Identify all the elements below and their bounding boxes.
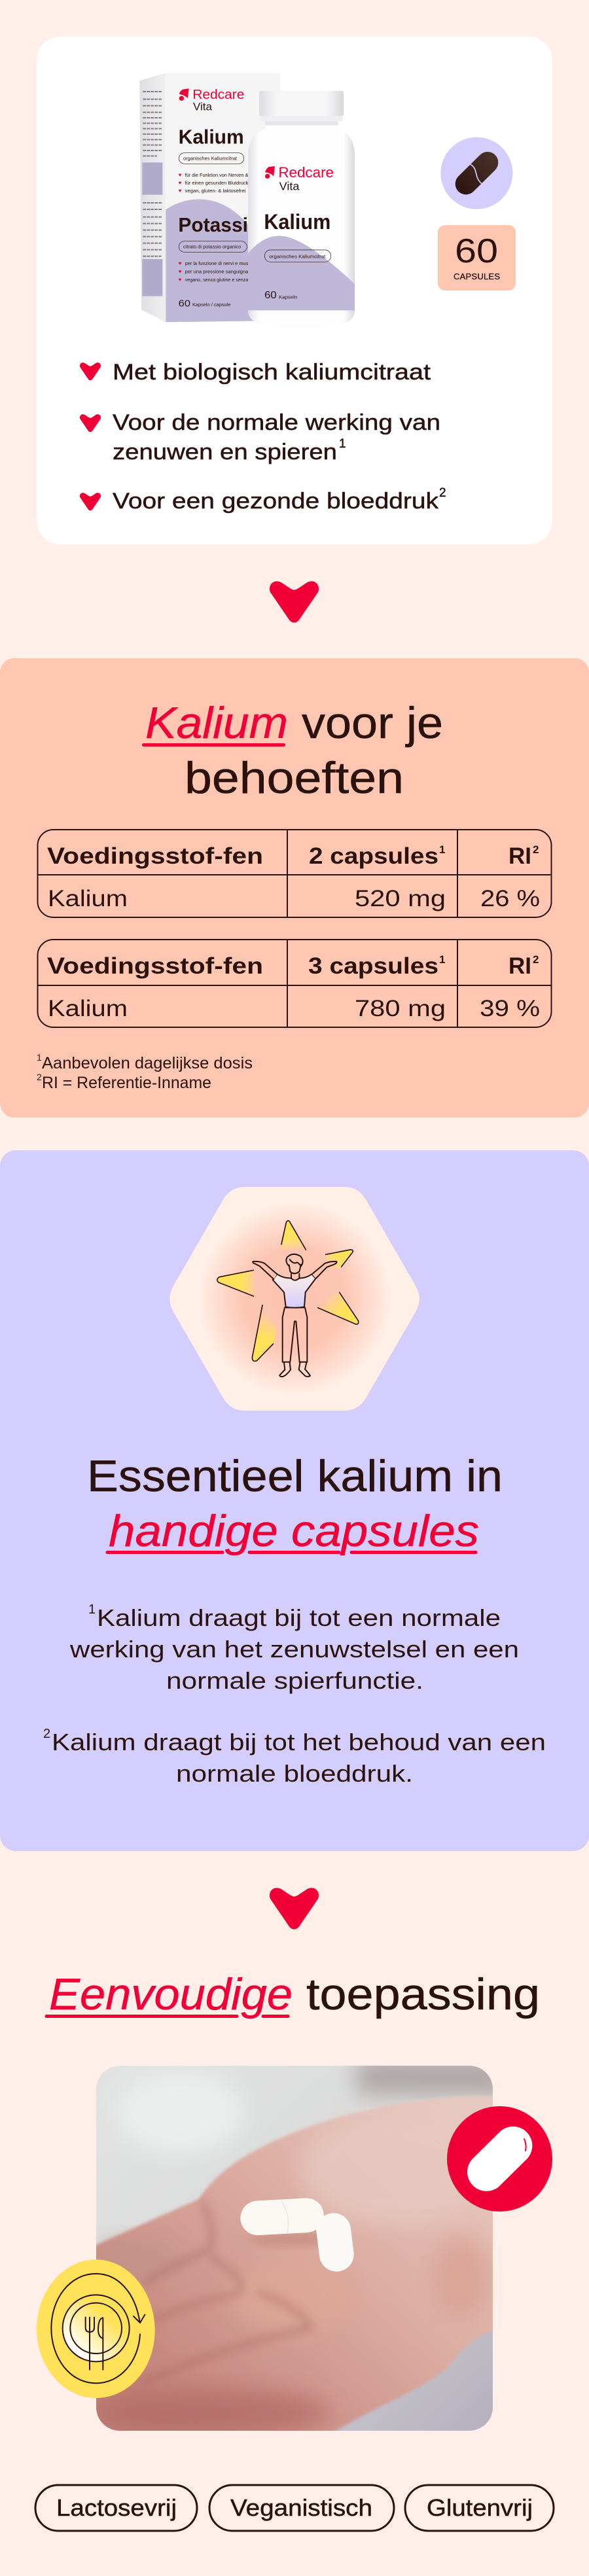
panel: product card	[37, 37, 552, 544]
box: vegan, gluten- & laktosefrei	[185, 189, 246, 194]
box: ♥	[179, 277, 182, 283]
pill: Glutenvrij	[405, 2485, 554, 2531]
illustration: person with stars in hexagon	[170, 1187, 419, 1411]
heading: Kalium voor je behoeften: Kalium	[145, 698, 288, 748]
box: Potassi	[178, 214, 248, 236]
footnotes: RI = Referentie-Inname	[42, 1074, 211, 1092]
benefit list	[80, 360, 446, 514]
icon: yellow plate badge	[37, 2259, 155, 2398]
bottle: 60	[264, 290, 277, 301]
heading: Essentieel kalium in handige capsules: handige capsules	[109, 1506, 479, 1556]
capsule shadow	[251, 2231, 318, 2248]
bottle: Redcare	[278, 164, 334, 181]
bottle: Kalium	[264, 209, 330, 234]
box: ♥	[179, 188, 182, 194]
pill: Lactosevrij	[35, 2485, 197, 2531]
text block: footnotes: normale bloeddruk.	[176, 1760, 413, 1787]
bottle: organisches Kaliumcitrat	[269, 253, 326, 259]
table: 3 capsules: RI	[509, 953, 531, 979]
box: Redcare	[192, 87, 244, 102]
text block: footnotes: 1	[88, 1602, 96, 1617]
heading: Eenvoudige toepassing: Eenvoudige	[49, 1969, 293, 2019]
heading: Kalium voor je behoeften: behoeften	[185, 753, 404, 803]
icon: heart bullet	[80, 414, 101, 432]
table: 3 capsules: Kalium	[48, 996, 128, 1021]
benefit 2: zenuwen en spieren	[113, 440, 337, 465]
benefit 3: 2	[439, 486, 446, 500]
footnotes: 2	[37, 1072, 42, 1082]
box: Kalium	[179, 126, 244, 148]
text block: footnotes	[43, 1602, 546, 1787]
badge: 60 capsules	[438, 225, 516, 291]
table: 2 capsules: 2 capsules	[309, 843, 438, 869]
feature pills	[35, 2485, 554, 2531]
box: citrato di potassio organico	[183, 244, 241, 250]
icon: heart bullet	[80, 493, 101, 510]
text block: footnotes: Kalium draagt bij tot een normale	[97, 1604, 501, 1631]
table: 2 capsules: Kalium	[48, 886, 128, 911]
text block: footnotes: 2	[43, 1727, 50, 1741]
benefit 2: 1	[339, 437, 346, 451]
badge: 60 capsules: 60	[455, 232, 498, 270]
person	[253, 1254, 336, 1377]
heading: Kalium voor je behoeften: voor je	[302, 698, 443, 748]
heading: Eenvoudige toepassing: toepassing	[306, 1969, 540, 2019]
box: per una pressione sanguigna	[185, 270, 248, 274]
bottle: Kapseln	[279, 294, 297, 300]
icon: heart arrow 2	[270, 1888, 319, 1930]
benefit 2	[113, 410, 440, 465]
table: 2 capsules: 1	[439, 843, 445, 856]
benefit 2: Voor de normale werking van	[113, 410, 440, 435]
table: 2 capsules: 520 mg	[355, 886, 446, 911]
box: vegano, senza glutine e senza	[185, 278, 248, 283]
pill: Veganistisch	[209, 2485, 394, 2531]
heading: Essentieel kalium in handige capsules: Essentieel kalium in	[87, 1451, 503, 1501]
table: 2 capsules: 26 %	[480, 886, 540, 911]
icon: heart bullet	[80, 362, 101, 380]
table: 3 capsules: 1	[439, 953, 445, 966]
bottle: Vita	[279, 180, 299, 193]
footnotes: Aanbevolen dagelijkse dosis	[42, 1054, 253, 1072]
box: Vita	[193, 100, 213, 113]
box: organisches Kaliumcitrat	[183, 156, 238, 162]
table: 3 capsules: 39 %	[480, 996, 540, 1021]
table: 2 capsules: 2	[533, 843, 539, 856]
box: ♥	[179, 268, 182, 274]
panel: kalium table	[0, 658, 589, 1118]
box	[139, 73, 280, 322]
footnotes	[37, 1052, 253, 1092]
icon: red capsule badge	[447, 2106, 552, 2212]
table: 3 capsules: Voedingsstof-fen	[47, 953, 263, 979]
photo: capsules in hand	[90, 2060, 507, 2439]
table: 3 capsules: 780 mg	[355, 996, 446, 1021]
stars	[217, 1221, 359, 1361]
box: für einen gesunden Blutdruck	[185, 181, 249, 186]
box: Kapseln / capsule	[192, 303, 230, 308]
box: ♥	[179, 260, 182, 266]
table: 3 capsules: 2	[533, 953, 539, 966]
heading: Essentieel kalium in handige capsules	[87, 1451, 503, 1556]
box: per la funzione di nervi e mus	[185, 262, 249, 266]
product image: box and bottle	[139, 73, 355, 327]
pill: Glutenvrij: Glutenvrij	[427, 2494, 533, 2521]
box: für die Funktion von Nerven &	[185, 173, 249, 178]
text block: footnotes: Kalium draagt bij tot het behoud van een	[52, 1729, 546, 1756]
panel: essential kalium	[0, 1150, 589, 1851]
icon: capsule in lavender circle	[440, 137, 512, 209]
table: 2 capsules: Voedingsstof-fen	[47, 843, 263, 869]
table: 2 capsules: RI	[509, 843, 531, 869]
pill: Lactosevrij: Lactosevrij	[56, 2494, 177, 2521]
pill: Veganistisch: Veganistisch	[230, 2494, 372, 2521]
text block: footnotes: normale spierfunctie.	[166, 1667, 423, 1694]
box: ♥	[179, 172, 182, 178]
benefit 1: Met biologisch kaliumcitraat	[113, 360, 431, 385]
heading: Kalium voor je behoeften	[142, 698, 443, 803]
box: 60	[179, 299, 190, 309]
table: 3 capsules	[37, 940, 552, 1027]
capsules	[258, 2201, 336, 2254]
bottle	[248, 91, 355, 327]
badge: 60 capsules: CAPSULES	[454, 272, 500, 281]
box: ♥	[179, 180, 182, 186]
benefit 3: Voor een gezonde bloeddruk	[113, 489, 439, 514]
table: 2 capsules	[37, 830, 552, 917]
heading: Eenvoudige toepassing	[46, 1969, 540, 2019]
table: 3 capsules: 3 capsules	[308, 953, 438, 979]
icon: heart arrow 1	[270, 581, 319, 623]
footnotes: 1	[37, 1052, 42, 1063]
text block: footnotes: werking van het zenuwstelsel en een	[69, 1636, 519, 1663]
